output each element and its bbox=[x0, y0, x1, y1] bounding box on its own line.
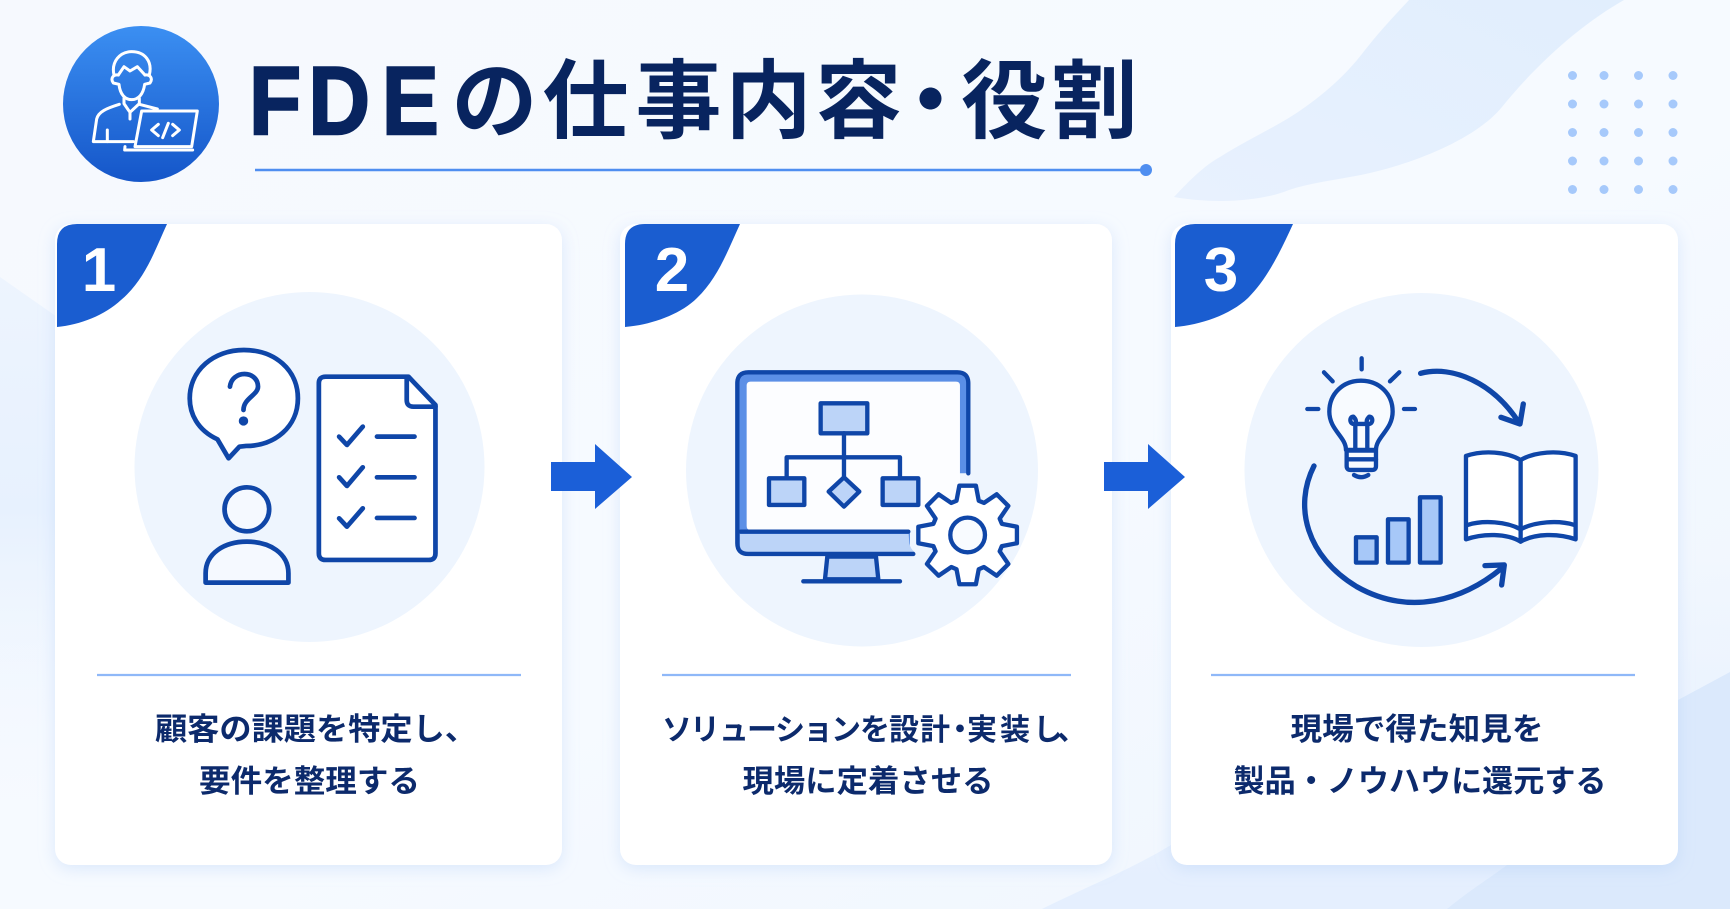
text: step 1: 顧客の課題を特定し、 bbox=[155, 712, 477, 747]
icon: lightbulb, bars, book and cycle arrows bbox=[1305, 358, 1576, 602]
icon circle: step 2 bbox=[686, 294, 1038, 646]
title underline bbox=[255, 164, 1152, 176]
divider 3 bbox=[1211, 674, 1635, 676]
icon circle: step 1 bbox=[134, 292, 484, 642]
divider 2 bbox=[662, 674, 1071, 676]
text: step 3: 現場で得た知見を bbox=[1290, 712, 1544, 747]
panel: step 1 bbox=[55, 224, 562, 865]
icon: monitor with flowchart and gear bbox=[737, 372, 1017, 584]
arrow: step 2 to 3 bbox=[1104, 444, 1185, 509]
text: step 1 bbox=[155, 712, 477, 799]
text: step 1: 要件を整理する bbox=[199, 764, 420, 799]
title: FDE bbox=[249, 47, 439, 155]
text: step 2 bbox=[662, 714, 1087, 799]
icon: engineer with laptop logo bbox=[63, 26, 219, 182]
number 3: 3 bbox=[1204, 236, 1238, 305]
icon circle: step 3 bbox=[1244, 293, 1598, 647]
dot pattern bbox=[1568, 71, 1678, 194]
badge: step 2 bbox=[625, 224, 740, 327]
panel: step 2 bbox=[620, 224, 1112, 865]
text: step 2: 現場に定着させる bbox=[742, 764, 994, 799]
text: step 2: ソリューションを設計・実装し、 bbox=[662, 714, 1087, 747]
title: の仕事内容・役割 bbox=[452, 54, 1138, 150]
text: step 3 bbox=[1234, 712, 1606, 799]
icon: question, person and checklist bbox=[190, 350, 435, 583]
text: step 3: 製品・ノウハウに還元する bbox=[1234, 764, 1606, 799]
panel: step 3 bbox=[1171, 224, 1678, 865]
number 1: 1 bbox=[82, 236, 116, 305]
divider 1 bbox=[97, 674, 521, 676]
arrow: step 1 to 2 bbox=[551, 444, 632, 509]
badge: step 1 bbox=[57, 224, 167, 327]
number 2: 2 bbox=[655, 236, 689, 305]
badge: step 3 bbox=[1175, 224, 1293, 327]
title bbox=[249, 47, 1138, 155]
